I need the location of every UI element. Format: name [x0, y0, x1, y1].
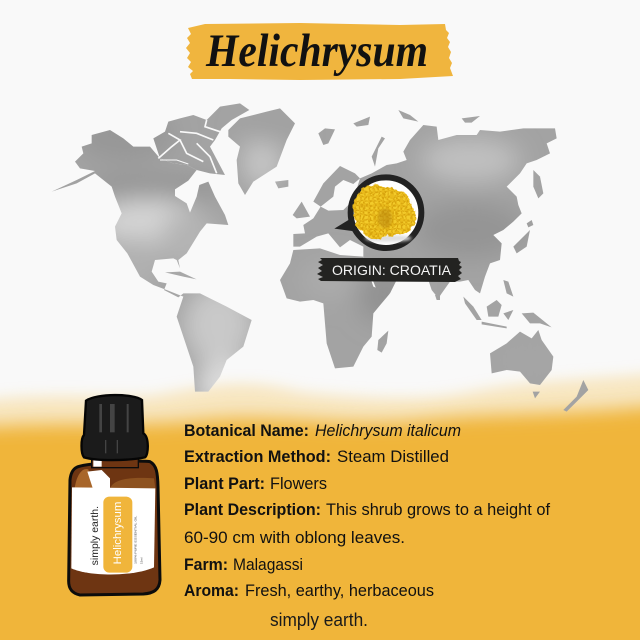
yellow label panel: [103, 497, 132, 573]
flower centre shadow: [378, 208, 392, 228]
marker pointer: [334, 216, 357, 232]
extraction method: Extraction Method:: [184, 448, 331, 466]
neck shine: [93, 460, 102, 467]
flower shadow: [365, 235, 412, 242]
botanical name: Botanical Name:: [184, 422, 309, 440]
farm: [184, 556, 303, 574]
label brush stroke: [317, 258, 462, 282]
plant part: Plant Part:: [184, 475, 265, 493]
plant description: [184, 501, 550, 547]
bottle body: [69, 461, 160, 595]
plant description: This shrub grows to a height of: [326, 501, 550, 519]
title text: Helichrysum: [205, 25, 428, 77]
plant description: Plant Description:: [184, 501, 321, 519]
plant part: [184, 475, 327, 493]
title brush stroke: [186, 23, 453, 80]
aroma: Fresh, earthy, herbaceous: [245, 582, 434, 600]
bottle label: [71, 487, 155, 574]
plant description: 60-90 cm with oblong leaves.: [184, 529, 405, 547]
world map: [52, 103, 588, 412]
plant part: Flowers: [270, 475, 327, 493]
brand on label: simply earth.: [90, 506, 101, 565]
amber highlight right: [110, 478, 155, 488]
extraction method: Steam Distilled: [337, 448, 449, 466]
label text: ORIGIN: CROATIA: [332, 262, 452, 278]
amber highlight left: [75, 469, 93, 489]
cap shine: [99, 404, 129, 453]
product name on label: Helichrysum: [112, 502, 124, 564]
yellow helichrysum flower: [354, 185, 417, 239]
marker ring: [351, 177, 421, 248]
essential oil bottle: [69, 395, 160, 595]
bottle cap: [81, 395, 148, 460]
brand logo: simply earth.: [270, 610, 368, 630]
extraction method: [184, 448, 449, 466]
botanical name: [184, 422, 461, 440]
aroma: Aroma:: [184, 582, 239, 600]
title banner: [186, 23, 453, 80]
farm: Malagassi: [233, 556, 303, 574]
details text: [184, 422, 550, 600]
label volume: 15ml: [139, 557, 143, 564]
yellow watercolor footer band: [0, 372, 640, 640]
label small print: 100% PURE ESSENTIAL OIL: [134, 515, 138, 564]
farm: Farm:: [184, 556, 228, 574]
origin label: [317, 258, 462, 282]
bottle neck: [92, 458, 138, 468]
origin marker: flower in magnifier: [334, 177, 421, 248]
botanical name: Helichrysum italicum: [315, 422, 461, 440]
neck highlight: [87, 470, 110, 490]
